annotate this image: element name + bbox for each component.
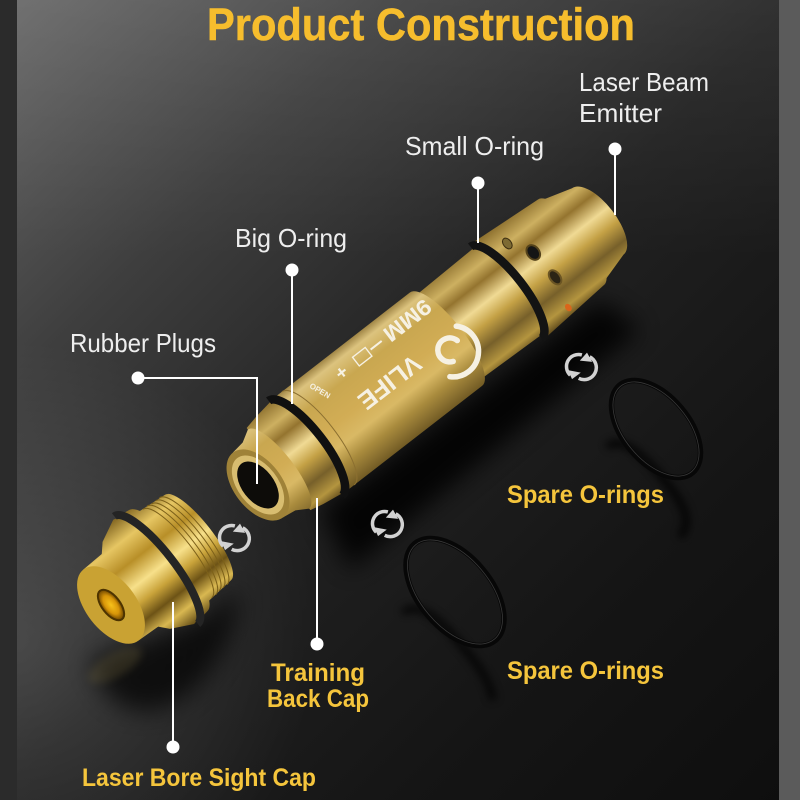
- collar: [116, 498, 223, 622]
- icon: rotate arrows middle: [368, 504, 407, 543]
- neck section: [414, 238, 554, 381]
- label: laser bore sight cap: Laser Bore Sight Cap: [82, 764, 316, 792]
- label: big o-ring: Big O-ring: [235, 223, 347, 253]
- 9MM mark: 9MM: [378, 294, 436, 347]
- cap face: [64, 554, 158, 656]
- rear chamfer: [243, 391, 355, 515]
- cap o-ring: [114, 505, 213, 624]
- threaded section: [136, 483, 245, 603]
- callout: small o-ring leader: [472, 176, 484, 243]
- spare o-ring upper: [594, 364, 718, 494]
- spare o-ring lower: [387, 521, 523, 663]
- battery and plus marks: +: [330, 360, 352, 384]
- bore sight cap: [50, 475, 251, 674]
- label: spare o-rings upper: Spare O-rings: [507, 481, 664, 509]
- main laser cartridge body: [202, 163, 649, 547]
- title: Product Construction: [207, 0, 635, 50]
- icon: rotate arrows right: [562, 347, 601, 386]
- label: laser beam emitter: Laser Beam: [579, 67, 709, 97]
- label: training back cap: Training: [271, 659, 365, 687]
- label: small o-ring: Small O-ring: [405, 131, 544, 161]
- step: [83, 546, 168, 641]
- laser aperture: [93, 585, 129, 625]
- rear face with rubber plug: [214, 438, 302, 532]
- label: laser beam emitter: [579, 67, 709, 128]
- big o-ring: [269, 389, 357, 496]
- label: training back cap: Back Cap: [267, 685, 369, 713]
- callout: training back cap leader: [310, 498, 324, 650]
- cone: [90, 509, 208, 642]
- open mark: OPEN: [308, 381, 332, 401]
- nose section: [539, 169, 644, 283]
- callout: rubber plugs leader: [132, 372, 257, 484]
- engraved markings: [329, 294, 460, 416]
- icon: rotate arrows left: [215, 518, 254, 557]
- rear step: [227, 420, 321, 525]
- callout: bore sight cap leader: [166, 602, 180, 754]
- label: rubber plugs: Rubber Plugs: [70, 328, 216, 358]
- callout: laser beam emitter leader: [608, 142, 622, 215]
- brand name: VLIFE: [352, 349, 426, 415]
- label: training back cap: [267, 659, 369, 713]
- callout: big o-ring leader: [286, 264, 298, 404]
- logo: [428, 322, 489, 383]
- small o-ring: [471, 236, 556, 338]
- set screw holes: [500, 225, 581, 319]
- emitter head: [471, 184, 621, 339]
- large body: [274, 281, 496, 491]
- shadows under parts: [83, 300, 686, 711]
- label: spare o-rings lower: Spare O-rings: [507, 657, 664, 685]
- label: laser beam emitter: Emitter: [579, 98, 662, 128]
